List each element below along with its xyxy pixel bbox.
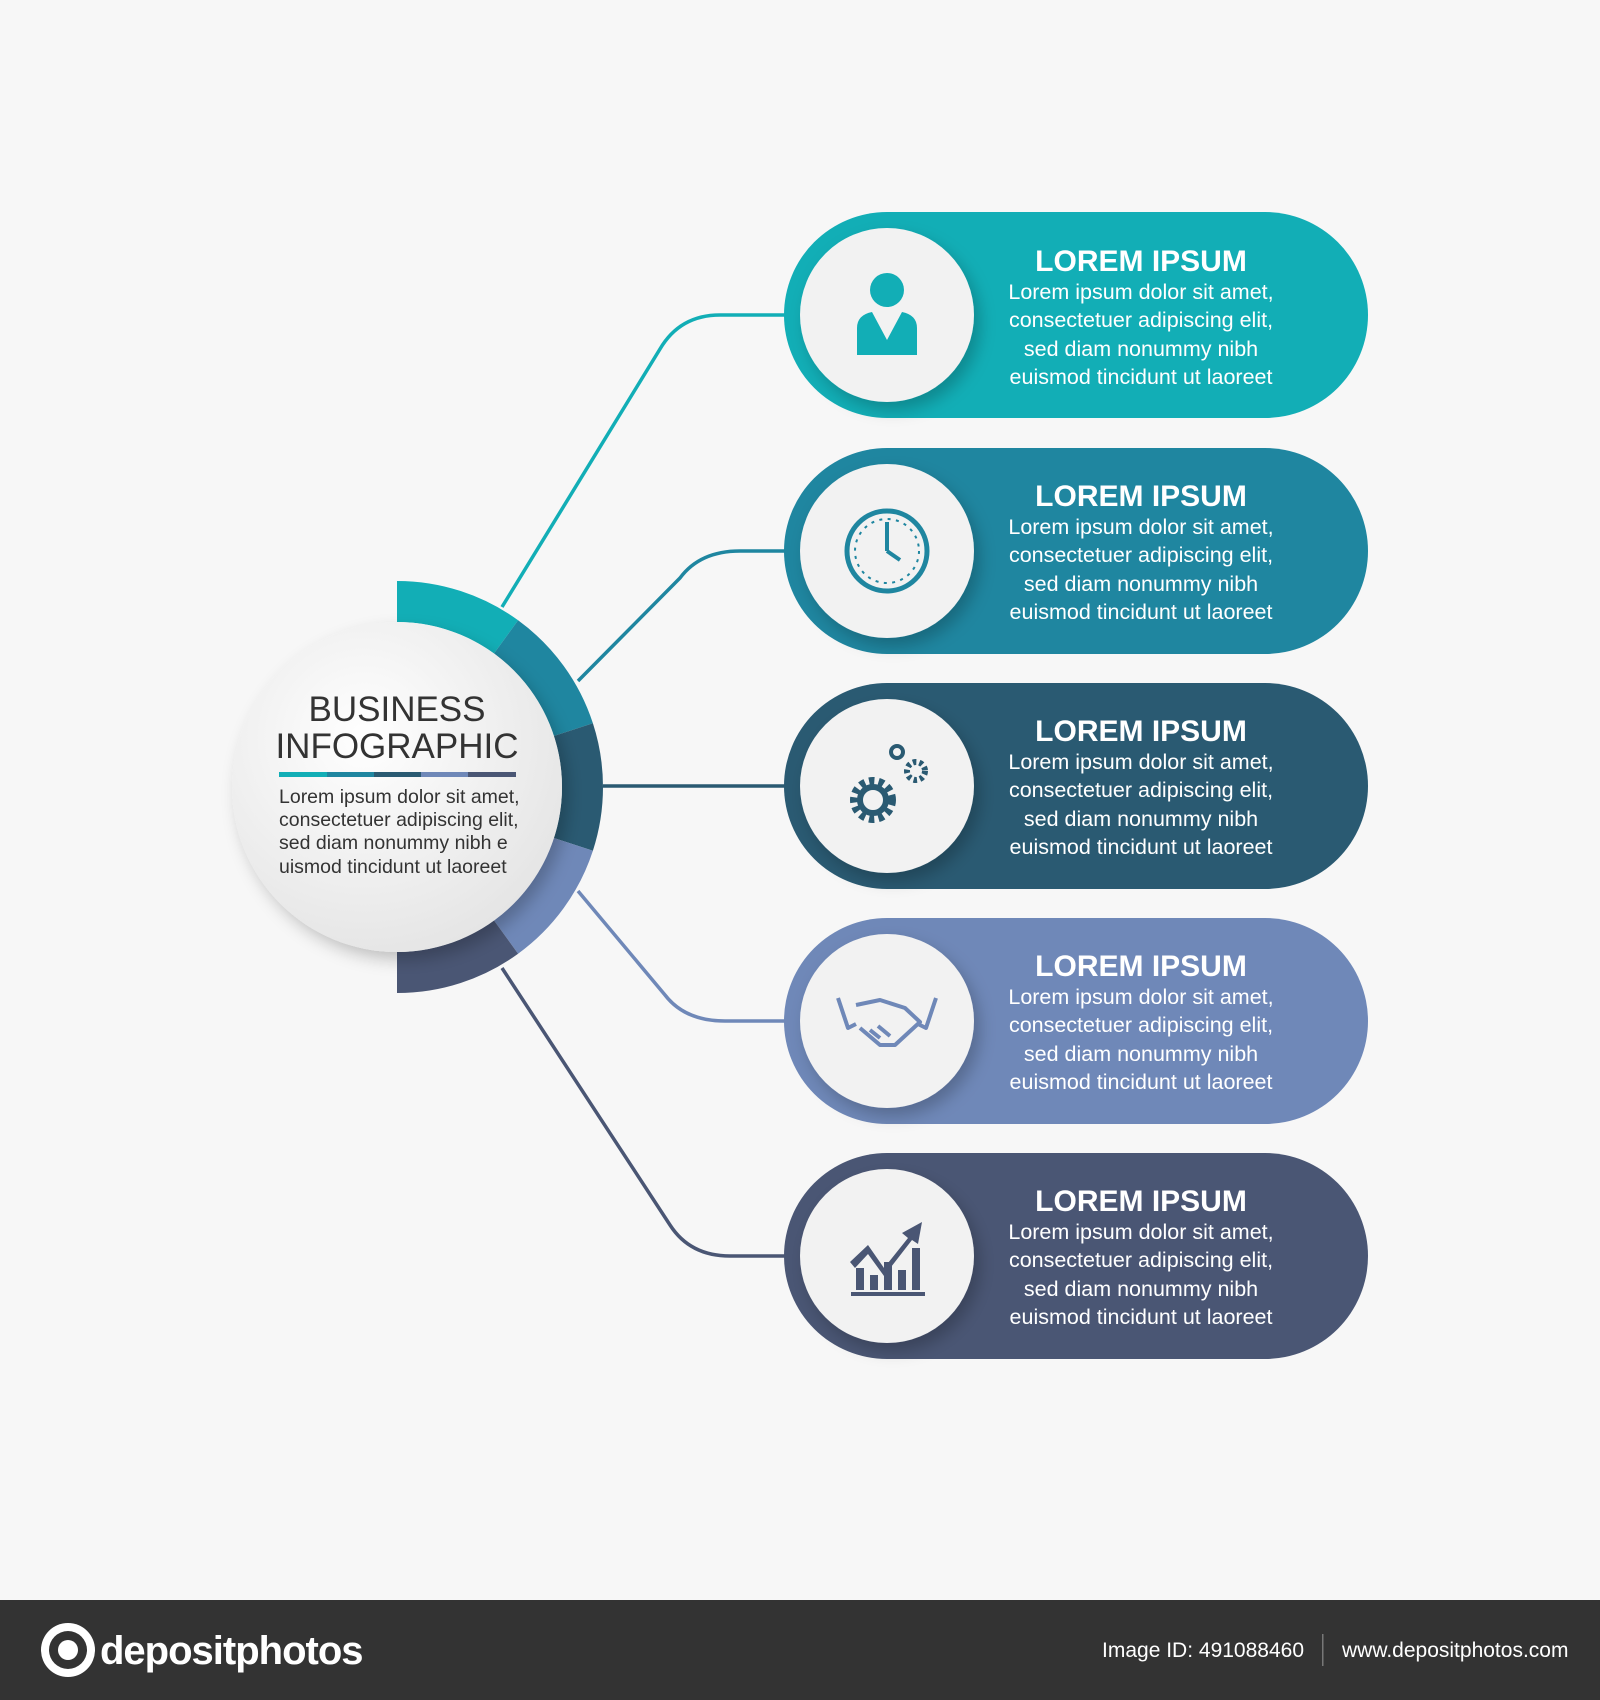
center text: uismod tincidunt ut laoreet bbox=[279, 856, 507, 878]
footer bar bbox=[0, 1600, 1600, 1700]
panel 4 bbox=[784, 918, 1368, 1124]
panel 2 bbox=[784, 448, 1368, 654]
footer logo bbox=[41, 1623, 363, 1677]
panel 2: LOREM IPSUM bbox=[1035, 480, 1247, 513]
panel 1: LOREM IPSUM bbox=[1035, 245, 1247, 278]
panel 4: consectetuer adipiscing elit, bbox=[1009, 1013, 1273, 1037]
panel 5: euismod tincidunt ut laoreet bbox=[1010, 1305, 1272, 1329]
icon: handshake bbox=[838, 998, 936, 1045]
panel 5: consectetuer adipiscing elit, bbox=[1009, 1248, 1273, 1272]
panel 2: sed diam nonummy nibh bbox=[1024, 572, 1258, 596]
panel 3 bbox=[784, 683, 1368, 889]
panel 3: euismod tincidunt ut laoreet bbox=[1010, 835, 1272, 859]
center circle with title bbox=[232, 622, 562, 952]
icon: person bbox=[857, 273, 917, 355]
center text: Lorem ipsum dolor sit amet, bbox=[279, 786, 520, 808]
panel 1: consectetuer adipiscing elit, bbox=[1009, 308, 1273, 332]
panel 2: Lorem ipsum dolor sit amet, bbox=[1008, 515, 1274, 539]
panel 4: Lorem ipsum dolor sit amet, bbox=[1008, 985, 1274, 1009]
center circle with title: INFOGRAPHIC bbox=[275, 727, 519, 766]
panel 4: euismod tincidunt ut laoreet bbox=[1010, 1070, 1272, 1094]
panel 1: Lorem ipsum dolor sit amet, bbox=[1008, 280, 1274, 304]
icon: gears bbox=[855, 746, 925, 818]
panel 1 bbox=[784, 212, 1368, 418]
title: BUSINESS bbox=[308, 690, 486, 729]
connector lines bbox=[502, 315, 790, 1256]
footer id: Image ID: 491088460 bbox=[1102, 1639, 1304, 1662]
panel 1: sed diam nonummy nibh bbox=[1024, 337, 1258, 361]
panel 3: sed diam nonummy nibh bbox=[1024, 807, 1258, 831]
icon: growth chart bbox=[850, 1222, 925, 1296]
icon: clock bbox=[847, 511, 927, 591]
panel 3: Lorem ipsum dolor sit amet, bbox=[1008, 750, 1274, 774]
panel 5: Lorem ipsum dolor sit amet, bbox=[1008, 1220, 1274, 1244]
panel 2: consectetuer adipiscing elit, bbox=[1009, 543, 1273, 567]
center text: sed diam nonummy nibh e bbox=[279, 832, 508, 854]
panel 5: LOREM IPSUM bbox=[1035, 1185, 1247, 1218]
ring segments around center circle bbox=[397, 581, 603, 993]
panel 5 bbox=[784, 1153, 1368, 1359]
panel 1: euismod tincidunt ut laoreet bbox=[1010, 365, 1272, 389]
center text bbox=[279, 786, 520, 878]
panel 5: sed diam nonummy nibh bbox=[1024, 1277, 1258, 1301]
panel 3: LOREM IPSUM bbox=[1035, 715, 1247, 748]
footer url: www.depositphotos.com bbox=[1341, 1639, 1568, 1662]
panel 4: LOREM IPSUM bbox=[1035, 950, 1247, 983]
center text: consectetuer adipiscing elit, bbox=[279, 809, 519, 831]
panel 4: sed diam nonummy nibh bbox=[1024, 1042, 1258, 1066]
panel 2: euismod tincidunt ut laoreet bbox=[1010, 600, 1272, 624]
color bar bbox=[279, 772, 516, 777]
footer logo: depositphotos bbox=[100, 1629, 363, 1673]
panel 3: consectetuer adipiscing elit, bbox=[1009, 778, 1273, 802]
